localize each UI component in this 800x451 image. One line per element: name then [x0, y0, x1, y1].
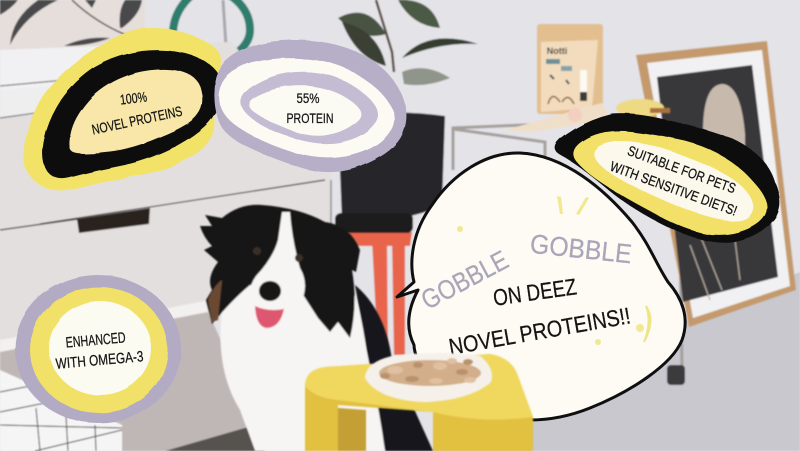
white tiled block [0, 370, 122, 451]
bubble sparkles [457, 196, 651, 345]
badge text: 100% [119, 88, 148, 108]
white bowl [365, 353, 492, 402]
picture frame with artwork [636, 41, 796, 327]
yellow table with bowl of food [305, 353, 533, 451]
dog [200, 205, 433, 451]
yellow ring [30, 287, 168, 413]
badge: 55% protein [214, 40, 406, 172]
brown fur tint [208, 280, 222, 322]
wall poster with leaves [0, 0, 145, 50]
badge text [55, 329, 144, 373]
heading: gobble gobble: GOBBLE [529, 229, 633, 269]
bubble shape [397, 153, 685, 420]
yellow ring [573, 131, 767, 235]
brush shapes [15, 275, 181, 423]
white blaze and muzzle [250, 212, 305, 317]
badge text: SUITABLE FOR PETS [625, 142, 738, 196]
badge: 100% novel proteins [23, 28, 222, 190]
badge: enhanced with omega-3 [15, 275, 181, 423]
badge: suitable for pets [555, 114, 780, 243]
cream centre [594, 141, 753, 221]
badge text: WITH OMEGA-3 [55, 348, 144, 373]
white centre [49, 301, 151, 395]
dog head black fur [200, 205, 360, 338]
speech bubble [397, 153, 685, 420]
black brush ring [43, 50, 222, 179]
badge text: ENHANCED [65, 329, 126, 352]
lilac outer [15, 275, 181, 423]
yellow brush ring [23, 28, 221, 190]
Notti product bag: Notti [547, 46, 567, 56]
badge text: 55% [296, 90, 320, 106]
plant pot [335, 112, 445, 233]
brush shapes [23, 28, 222, 190]
white centre [249, 86, 361, 136]
caster wheel [667, 365, 685, 385]
yellow treat on table [616, 99, 670, 117]
plant [338, 0, 478, 85]
badge text: PROTEIN [286, 110, 334, 126]
brush shapes [555, 114, 780, 243]
text: on deez: ON DEEZ [491, 273, 578, 311]
eyes [253, 247, 261, 255]
badge text [608, 142, 739, 219]
metal pole [223, 0, 226, 46]
stool [345, 232, 412, 355]
Notti product bag [505, 24, 610, 132]
brush shapes [214, 40, 406, 172]
badge text: NOVEL PROTEINS [90, 103, 184, 137]
heading: gobble gobble [416, 229, 633, 315]
table body [305, 354, 533, 451]
black brush outer [555, 114, 780, 243]
tongue [255, 306, 284, 328]
badge text [286, 90, 334, 126]
text: novel proteins: NOVEL PROTEINS!! [447, 302, 632, 360]
lilac outer [214, 40, 406, 172]
badge text: WITH SENSITIVE DIETS! [608, 158, 739, 219]
green hoop [173, 0, 250, 52]
dog back fur [355, 285, 433, 451]
badge text [90, 88, 184, 137]
cream centre [69, 69, 202, 154]
wall below the cabinet [0, 312, 260, 451]
floor [430, 272, 800, 451]
table top surface [305, 354, 533, 420]
dark floor [165, 425, 265, 451]
cabinet [0, 42, 331, 352]
white ring [219, 58, 394, 158]
metal side table [453, 118, 690, 370]
white body [220, 270, 385, 451]
heading: gobble gobble: GOBBLE [416, 245, 513, 315]
nose [259, 281, 281, 301]
table opening [338, 408, 366, 451]
lilac ring [241, 72, 378, 144]
food [379, 358, 481, 386]
